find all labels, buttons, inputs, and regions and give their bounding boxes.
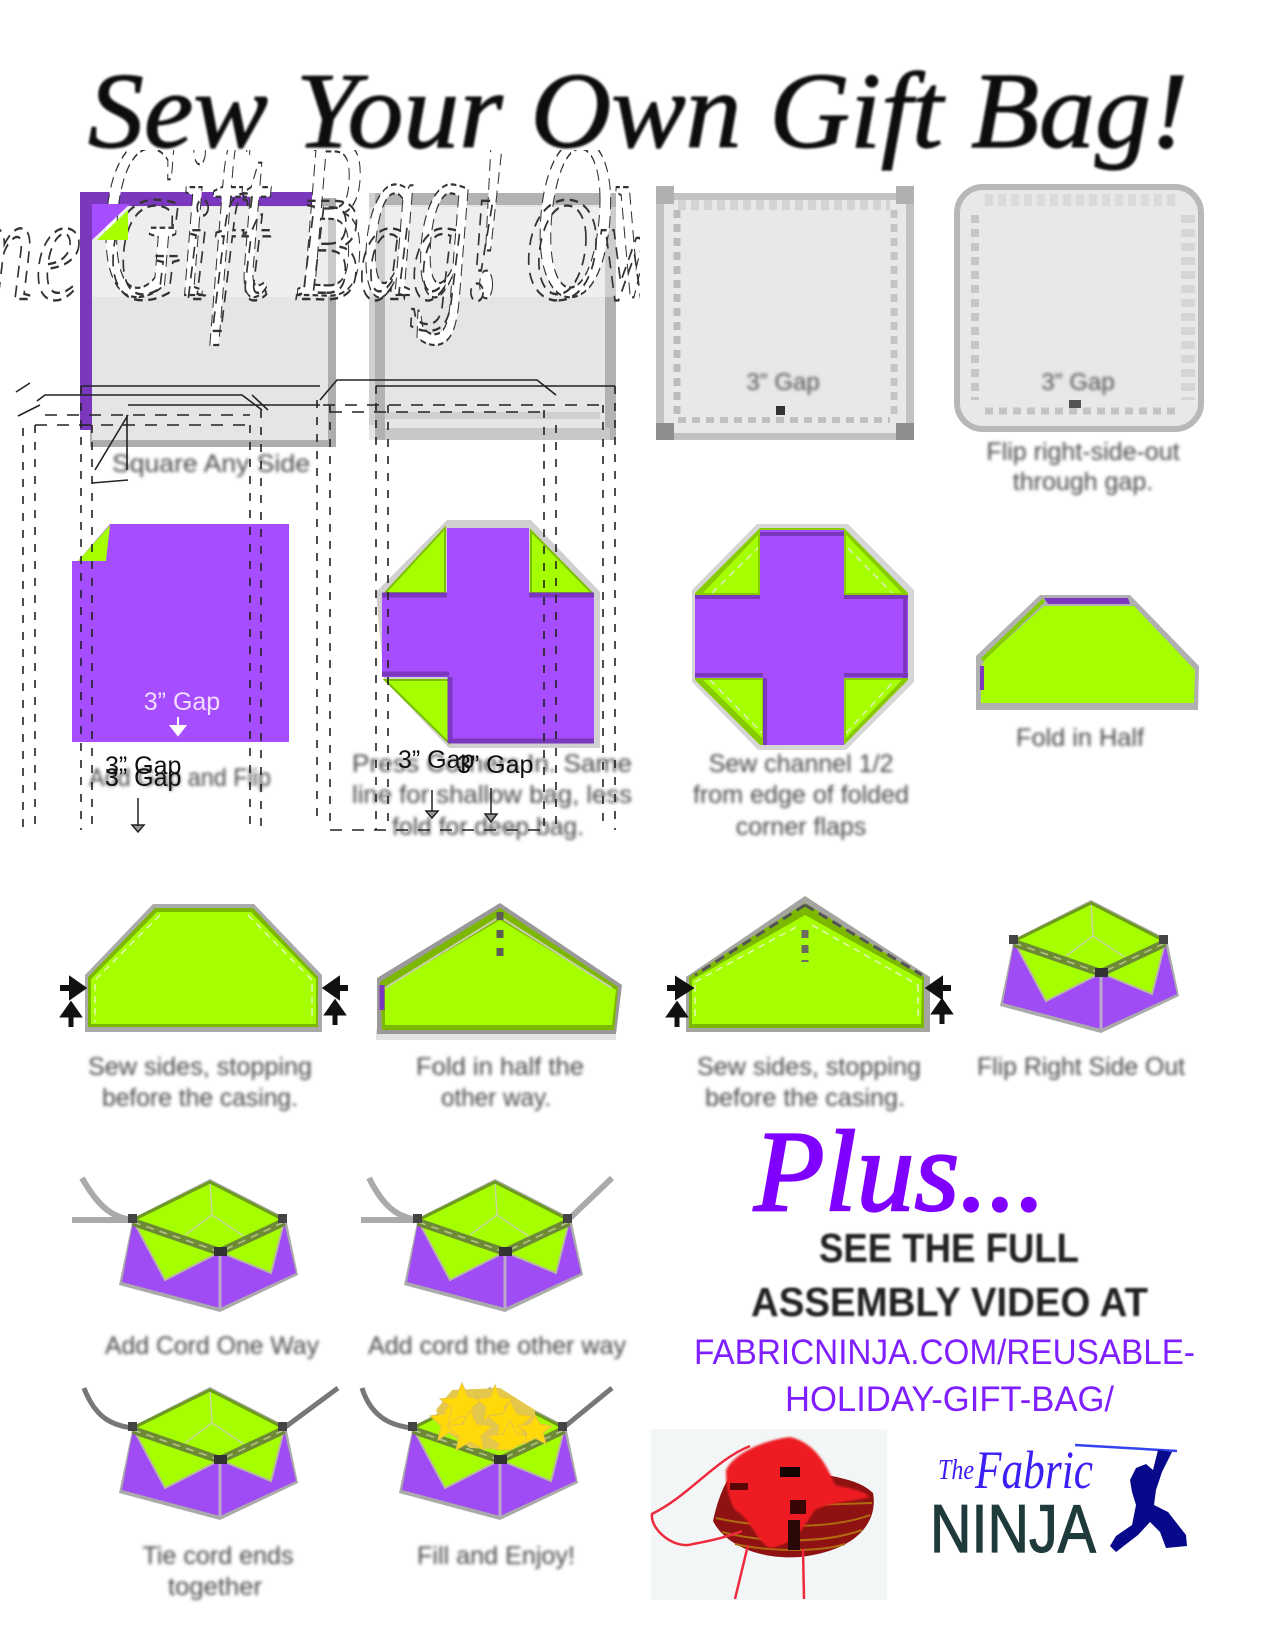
logo text: the: The [938,1455,974,1486]
text: see the full: SEE THE FULL [819,1225,1079,1271]
icon: bag with cord one way [72,1178,298,1312]
icon: folded corner step 1 [92,204,130,240]
panel: step 8 fold in half [976,595,1199,710]
arrow: up [64,1005,78,1027]
caption: sew channel: corner flaps [736,813,866,841]
panel: step 11 pointed shape with arrows [667,896,951,1032]
logo text: fabric: Fabric [974,1440,1093,1500]
caption: sew sides [88,1053,312,1112]
text: url line two: HOLIDAY-GIFT-BAG/ [785,1380,1114,1419]
panel: step 5 purple square [72,524,289,742]
icon: flipped bag [1000,900,1179,1033]
panel: step 7 sewn cross [692,524,914,750]
arrow: up [935,1002,949,1024]
panel: step 3 sewn square [656,186,914,440]
caption: add cord one way: Add Cord One Way [105,1332,319,1360]
arrow: gap [1069,400,1081,408]
caption: fold in half other way [416,1053,584,1112]
label: 3 inch gap: 3” Gap [1041,369,1115,396]
caption: fold in half: Fold in Half [1016,724,1144,752]
text: assembly video at: ASSEMBLY VIDEO AT [751,1279,1148,1325]
caption: sew channel [693,750,909,841]
icon: bag with cord other way [361,1178,612,1312]
black gap labels: 3” Gap [105,752,181,780]
panel: step 6 cross [376,520,600,748]
caption: fill and enjoy: Fill and Enjoy! [417,1542,575,1570]
logo: the fabric ninja [930,1440,1187,1567]
ribbon [652,1446,804,1599]
caption: press corners in: fold for deep bag. [392,813,584,841]
caption: fold in half other way: other way. [441,1084,551,1112]
label: 3 inch gap: 3” Gap [746,369,820,396]
panel: step 9 trapezoid [60,904,348,1032]
text: url line one: FABRICNINJA.COM/REUSABLE- [694,1333,1195,1372]
panel: step 1 square [80,192,336,478]
caption: flip right side out through gap: Flip right-side-out [986,438,1180,466]
caption: flip right side out: Flip Right Side Out [977,1053,1185,1081]
caption: tie cord ends together: together [168,1573,262,1601]
caption: add gap and flip: Add Gap and Flip [89,764,271,792]
caption: press corners in [352,750,632,841]
caption: tie cord ends together: Tie cord ends [142,1542,294,1570]
black gap labels: 3” Gap [457,751,533,779]
icon: ninja silhouette [1075,1445,1187,1552]
caption: press corners in: Press Corners In. Same [352,750,632,778]
caption: press corners in: line for shallow bag, less [352,781,632,809]
caption: step 1: Square Any Side [112,450,310,478]
caption: fold in half other way: Fold in half the [416,1053,584,1081]
icon: stars [430,1383,552,1450]
panel: step 4 rounded square [957,187,1201,429]
caption: flip right side out through gap [986,438,1180,496]
arrow: left [327,981,348,995]
caption: sew sides second: Sew sides, stopping [697,1053,921,1081]
icon: filled bag with stars [362,1383,612,1520]
logo text: ninja: NINJA [930,1491,1097,1567]
panel: step 10 pointed shape [376,903,622,1040]
arrow: right [667,981,689,995]
caption: add cord other way: Add cord the other way [368,1332,627,1360]
heading: plus: Plus... [753,1108,1046,1235]
arrows: wireframe down [132,788,497,832]
arrow: up [670,1005,684,1027]
caption: sew sides second [697,1053,921,1112]
caption: sew sides: Sew sides, stopping [88,1053,312,1081]
black gap labels: 3” Gap [398,746,474,774]
caption: sew channel: from edge of folded [693,781,909,809]
caption: sew channel: Sew channel 1/2 [709,750,893,778]
caption: flip right side out through gap: through gap. [1013,468,1153,496]
photo: finished red bag [651,1429,887,1600]
label: 3 inch gap white: 3” Gap [144,688,220,716]
black gap labels [105,746,533,792]
panel: step 2 stitched square [369,193,616,440]
arrow: right [60,981,82,995]
ghost overlay text [0,150,640,346]
wireframe dashed outlines [16,380,615,830]
arrow: left [930,981,951,995]
arrow: up [328,1003,342,1025]
black gap labels: 3” Gap [105,764,181,792]
arrow: white down [171,717,185,735]
caption: tie cord ends together [142,1542,294,1601]
arrow: gap [776,406,785,415]
title: Sew Your Own Gift Bag! [88,52,1188,171]
caption: sew sides: before the casing. [102,1084,298,1112]
icon: tied bag [84,1387,338,1520]
caption: sew sides second: before the casing. [705,1084,905,1112]
